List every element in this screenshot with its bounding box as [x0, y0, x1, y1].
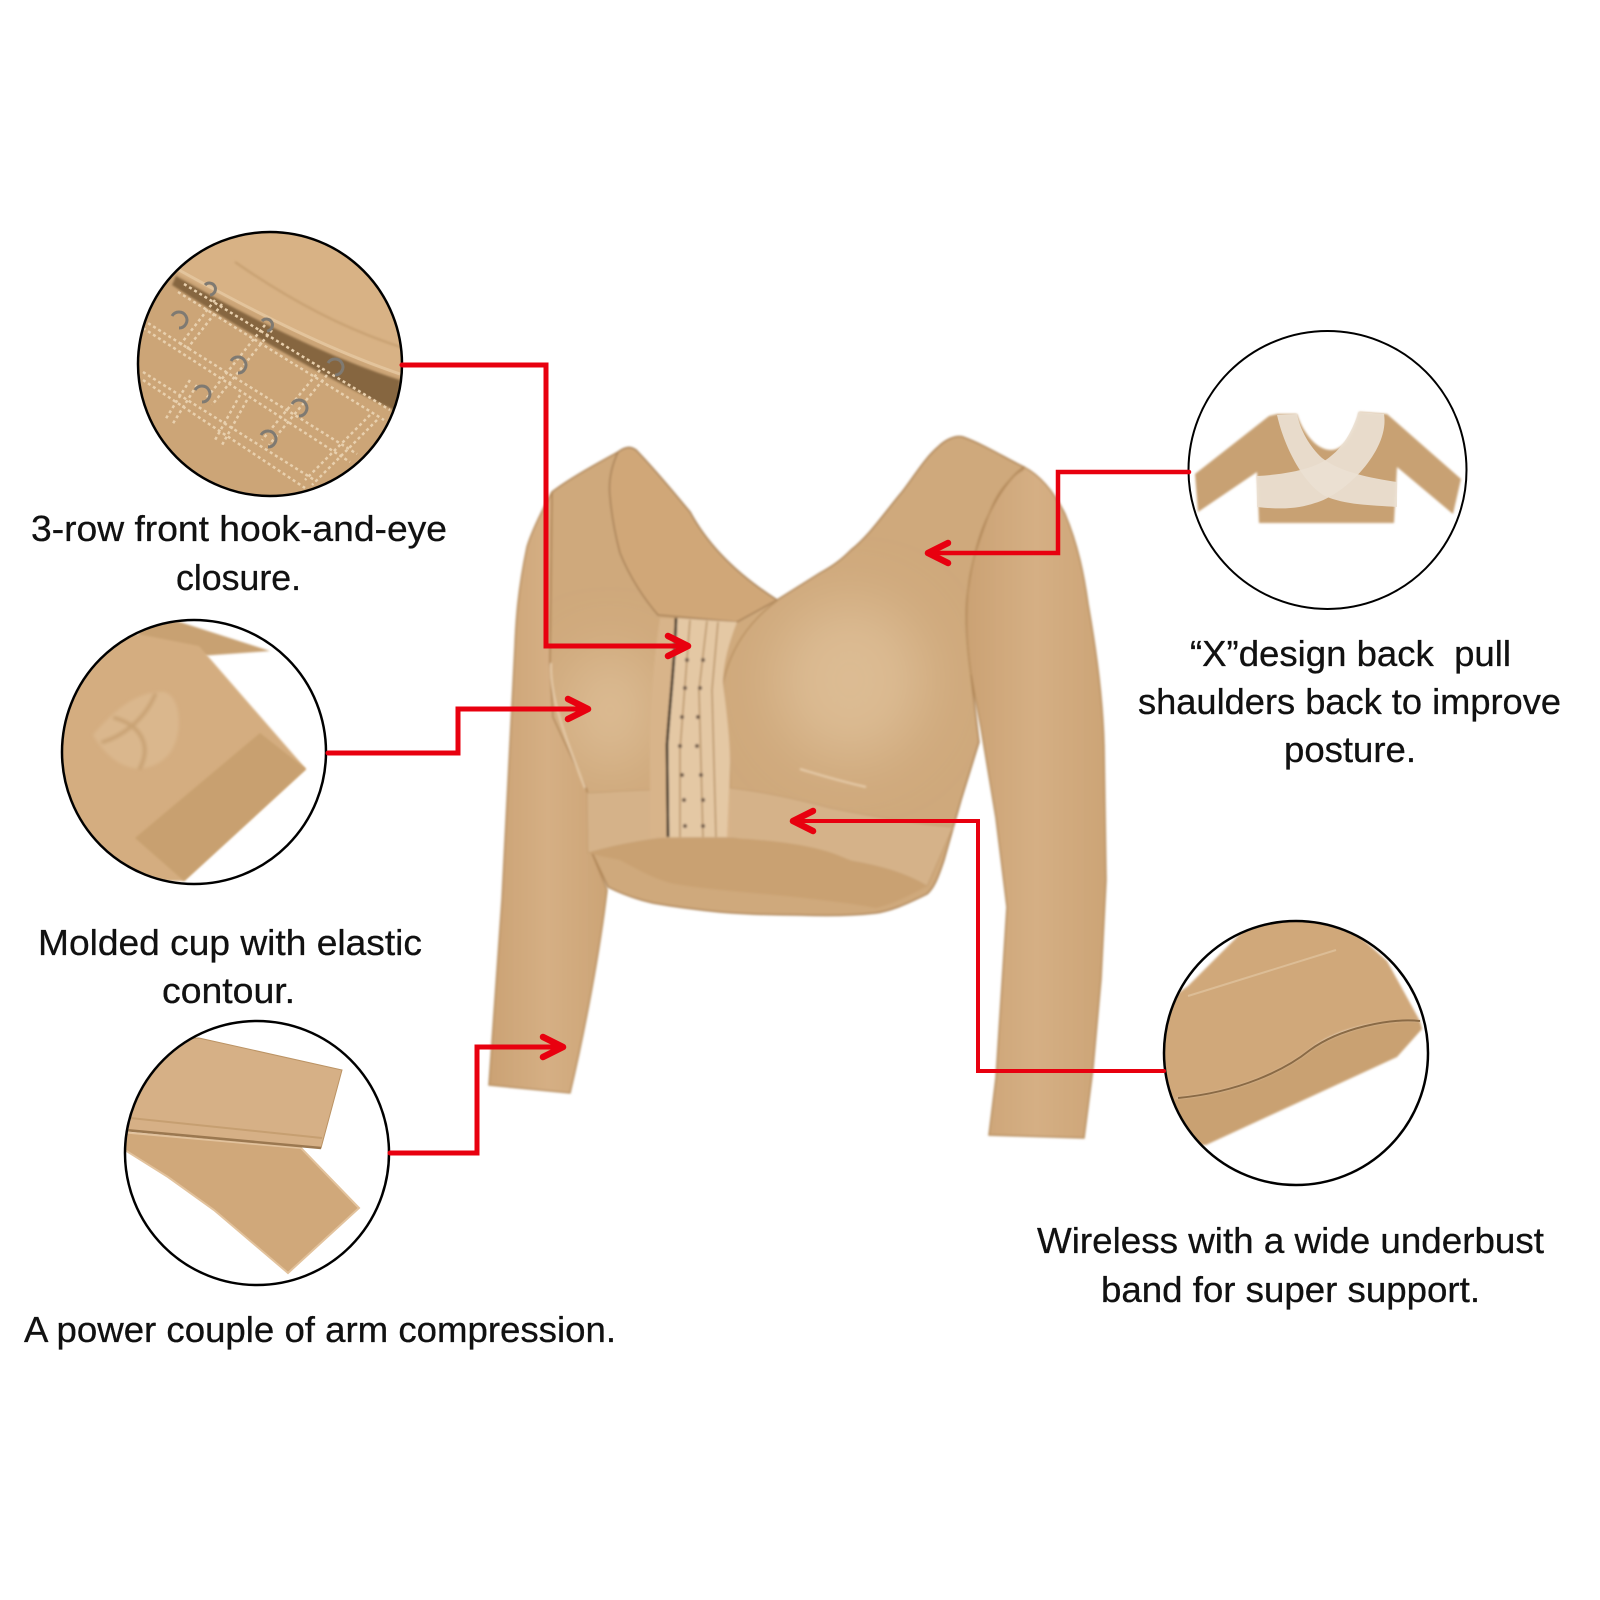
caption: hook-and-eye: closure. — [176, 557, 301, 598]
band outer fabric — [1165, 922, 1421, 1100]
detail circle: arm compression — [120, 1021, 389, 1285]
right sleeve — [966, 467, 1106, 1138]
arrow: closure — [402, 365, 688, 656]
caption: X back design — [1138, 633, 1561, 770]
dark hook strip — [172, 276, 400, 412]
detail circle: hook-and-eye closure — [136, 230, 404, 498]
detail circle: molded cup — [40, 615, 326, 884]
caption: underbust band: Wireless with a wide underbust — [1037, 1220, 1544, 1261]
caption: hook-and-eye — [31, 508, 447, 598]
metal hooks — [172, 283, 343, 447]
infographic canvas — [24, 230, 1560, 1350]
upper flap — [178, 234, 400, 376]
underbust band — [587, 788, 953, 886]
sleeve fold — [125, 1130, 321, 1148]
dotted eye rows — [143, 284, 390, 488]
arrow: molded cup — [328, 699, 588, 753]
fold edge — [1178, 1020, 1420, 1098]
caption: arm compression: A power couple of arm compression. — [24, 1309, 616, 1350]
flap edge — [179, 270, 400, 374]
sleeve band — [135, 733, 306, 881]
detail circle: underbust band — [1150, 915, 1428, 1185]
flap stitch line — [235, 262, 410, 350]
caption: molded cup: contour. — [162, 970, 295, 1011]
arrow: underbust band — [793, 811, 1164, 1071]
arrow: arm compression — [390, 1037, 563, 1153]
cup fabric — [63, 634, 307, 882]
caption: molded cup — [38, 922, 422, 1011]
caption: underbust band — [1037, 1220, 1544, 1310]
caption: X back design: posture. — [1284, 729, 1416, 770]
inner neckline lining — [609, 448, 777, 622]
caption: underbust band: band for super support. — [1101, 1269, 1480, 1310]
caption: hook-and-eye: 3-row front hook-and-eye — [31, 508, 447, 549]
front seam — [551, 663, 866, 788]
sleeve seam — [967, 469, 1024, 675]
caption: molded cup: Molded cup with elastic — [38, 922, 422, 963]
X straps — [1257, 412, 1397, 508]
bra body — [550, 437, 1024, 916]
molded swirl — [93, 692, 179, 768]
garment: long-sleeve posture bra — [489, 437, 1106, 1138]
upper sleeve — [120, 1038, 342, 1148]
band inner fold — [1150, 1020, 1422, 1145]
top fold — [138, 622, 270, 657]
lower sleeve — [120, 1132, 359, 1273]
detail circle: X back design — [1188, 331, 1466, 609]
caption: X back design: “X”design back pull — [1190, 633, 1511, 674]
seam — [1188, 950, 1336, 996]
mini garment back view — [1195, 412, 1461, 523]
caption: X back design: shaulders back to improve — [1138, 681, 1561, 722]
under-bra inner lining — [588, 838, 927, 908]
cup highlights — [565, 600, 925, 770]
arrow: X back — [928, 472, 1189, 563]
cup seam — [723, 600, 778, 788]
hook-and-eye closure strip — [650, 618, 737, 838]
left sleeve — [489, 492, 607, 1093]
